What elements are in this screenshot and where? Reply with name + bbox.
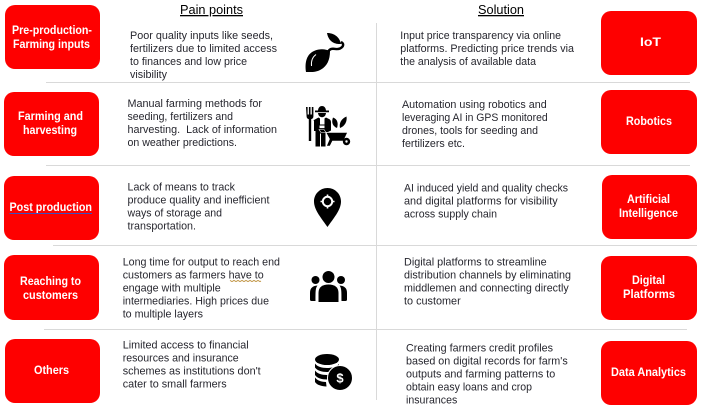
icon: location pin [314,188,341,227]
technology box: Digital Platforms [601,256,697,320]
solution: digital platforms: Digital platforms to streamline [404,257,547,269]
solution: IoT [400,30,575,68]
pain point: post production: produce quality and inefficient [128,194,270,206]
solution: artificial intelligence: across supply chain [404,209,497,221]
solution: data analytics: based on digital records for farm's [406,356,568,368]
pain point: others: Limited access to financial [123,340,249,352]
solution: artificial intelligence [404,183,568,221]
pain point: others: cater to small farmers [123,379,227,391]
stage box: Others [5,339,100,403]
technology box: Artificial Intelligence: Artificial [627,192,670,206]
stage box: Reaching to customers: Reaching to [20,274,81,288]
icon: farmer with pitchfork and wheelbarrow [306,106,350,146]
pain point: farming: seeding, fertilizers and [128,111,233,123]
solution: robotics: Automation using robotics and [402,99,547,111]
pain point: farming: Manual farming methods for [128,98,262,110]
solution: data analytics: insurances [406,395,458,407]
pain point: reaching customers: engage with multiple [123,283,221,295]
pain point: farming [128,98,277,149]
solution: digital platforms: to customer [404,296,461,308]
solution: robotics: leveraging AI in GPS monitored [402,112,548,124]
pain point: post production: Lack of means to track [128,182,235,194]
pain point: reaching customers: Long time for output to reach end [123,257,280,269]
technology box: Robotics: Robotics [626,114,672,128]
pain point: reaching customers: intermediaries. High prices due [123,296,269,308]
solution: digital platforms: distribution channels by eliminating [404,270,571,282]
pain point: pre-production: visibility [130,69,167,81]
solution: artificial intelligence: and digital platforms for visibility [404,196,558,208]
stage box: Others: Others [34,363,69,377]
pain point: pre-production: fertilizers due to limited access [130,43,277,55]
stage box: Post production: Post production [10,200,92,214]
technology box: Digital Platforms: Platforms [623,287,675,301]
solution: data analytics: Creating farmers credit profiles [406,343,553,355]
stage box: Farming and harvesting [4,92,99,156]
solution: robotics: fertilizers etc. [402,138,465,150]
solution: robotics [402,99,548,150]
icon: coin stack with dollar [315,354,352,390]
pain point: farming: harvesting. Lack of information [128,124,277,136]
stage box: Pre-production-Farming inputs: Farming inputs [13,37,90,51]
pain point: pre-production: to finances and low price [130,56,247,68]
technology box: Data Analytics: Data Analytics [611,365,686,379]
technology box: IoT [601,11,697,75]
stage box: Pre-production-Farming inputs [5,5,100,69]
pain point: pre-production: Poor quality inputs like seeds, [130,30,273,42]
solution: IoT: Input price transparency via online [400,30,561,42]
pain point: others: resources and insurance [123,353,239,365]
solution: artificial intelligence: AI induced yield and quality checks [404,183,568,195]
stage box: Post production [4,176,99,240]
technology box: Artificial Intelligence [602,175,697,239]
solution: IoT: the analysis of available data [400,56,537,68]
heading: Pain points: Pain points [180,2,243,17]
stage box: Farming and harvesting: harvesting [23,123,77,137]
solution: data analytics [406,343,568,407]
technology box: Digital Platforms: Digital [632,273,665,287]
pain point: post production: ways of storage and [127,208,222,220]
stage box: Farming and harvesting: Farming and [18,109,83,123]
solution: robotics: drones, tools for seeding and [402,125,538,137]
icon: group of people [310,271,347,302]
solution: IoT: platforms. Predicting price trends via [400,43,575,55]
pain point: farming: on weather predictions. [128,137,237,149]
technology box: IoT: IoT [640,35,661,49]
technology box: Robotics [601,90,697,154]
stage box: Pre-production-Farming inputs: Pre-production- [12,23,92,37]
icon: coin stack with dollar: $ [336,370,344,386]
solution: data analytics: obtain easy loans and crop [406,382,532,394]
pain point: others [123,340,262,391]
pain point: post production: transportation. [128,220,196,232]
pain point: reaching customers [123,257,280,321]
stage box: Reaching to customers: customers [23,288,78,302]
pain point: reaching customers: customers as farmers have to [123,270,264,282]
pain point: pre-production [130,30,277,81]
stage box: Reaching to customers [4,255,99,320]
solution: digital platforms: middlemen and connecting directly [404,283,569,295]
icon: seed with sprout [306,33,343,72]
pain point: others: schemes as institutions don't [123,366,262,378]
technology box: Artificial Intelligence: Intelligence [619,206,678,220]
pain point: post production [127,182,270,232]
technology box: Data Analytics [601,341,697,405]
solution: digital platforms [404,257,571,308]
heading: Solution: Solution [478,2,524,17]
solution: data analytics: outputs and farming patterns to [406,368,555,380]
pain point: reaching customers: to multiple layers [123,309,203,321]
